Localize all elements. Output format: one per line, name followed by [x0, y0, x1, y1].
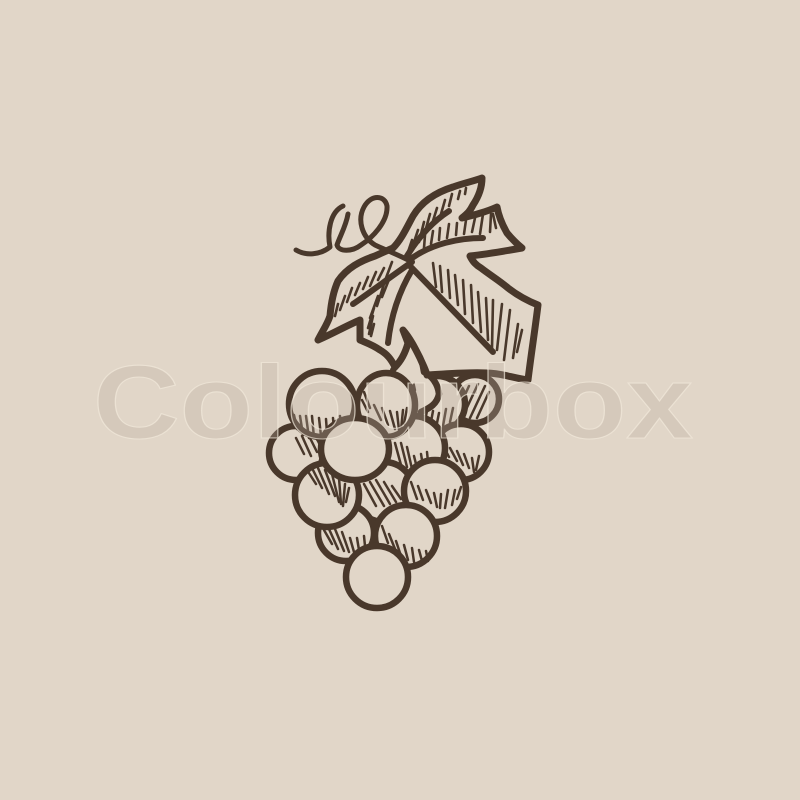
leaf outline: [318, 178, 538, 380]
vine leaf with stem and tendril: [296, 178, 538, 412]
grape: front lower: [375, 505, 437, 567]
grape: left middle: [295, 463, 359, 527]
grape: centre lower: [354, 462, 414, 522]
grape: lower left: [318, 505, 374, 561]
leaf hatching: [329, 188, 522, 360]
grape: right: [433, 424, 489, 480]
grape: upper right: [409, 376, 465, 432]
tendril: [296, 198, 412, 262]
stem: [403, 330, 439, 412]
grape: top left: [289, 371, 355, 438]
grape: far left: [269, 426, 323, 480]
grape: top middle: [357, 373, 415, 437]
grape: back right: [451, 375, 499, 423]
grape: centre back: [381, 416, 445, 480]
grape: front centre: [321, 418, 389, 480]
grape: right lower: [404, 460, 466, 522]
leaf veins: [353, 211, 493, 352]
grape bunch: [269, 371, 499, 608]
watermark: Colourbox: Colourbox: [93, 345, 693, 461]
grape: bottom: [346, 546, 408, 608]
